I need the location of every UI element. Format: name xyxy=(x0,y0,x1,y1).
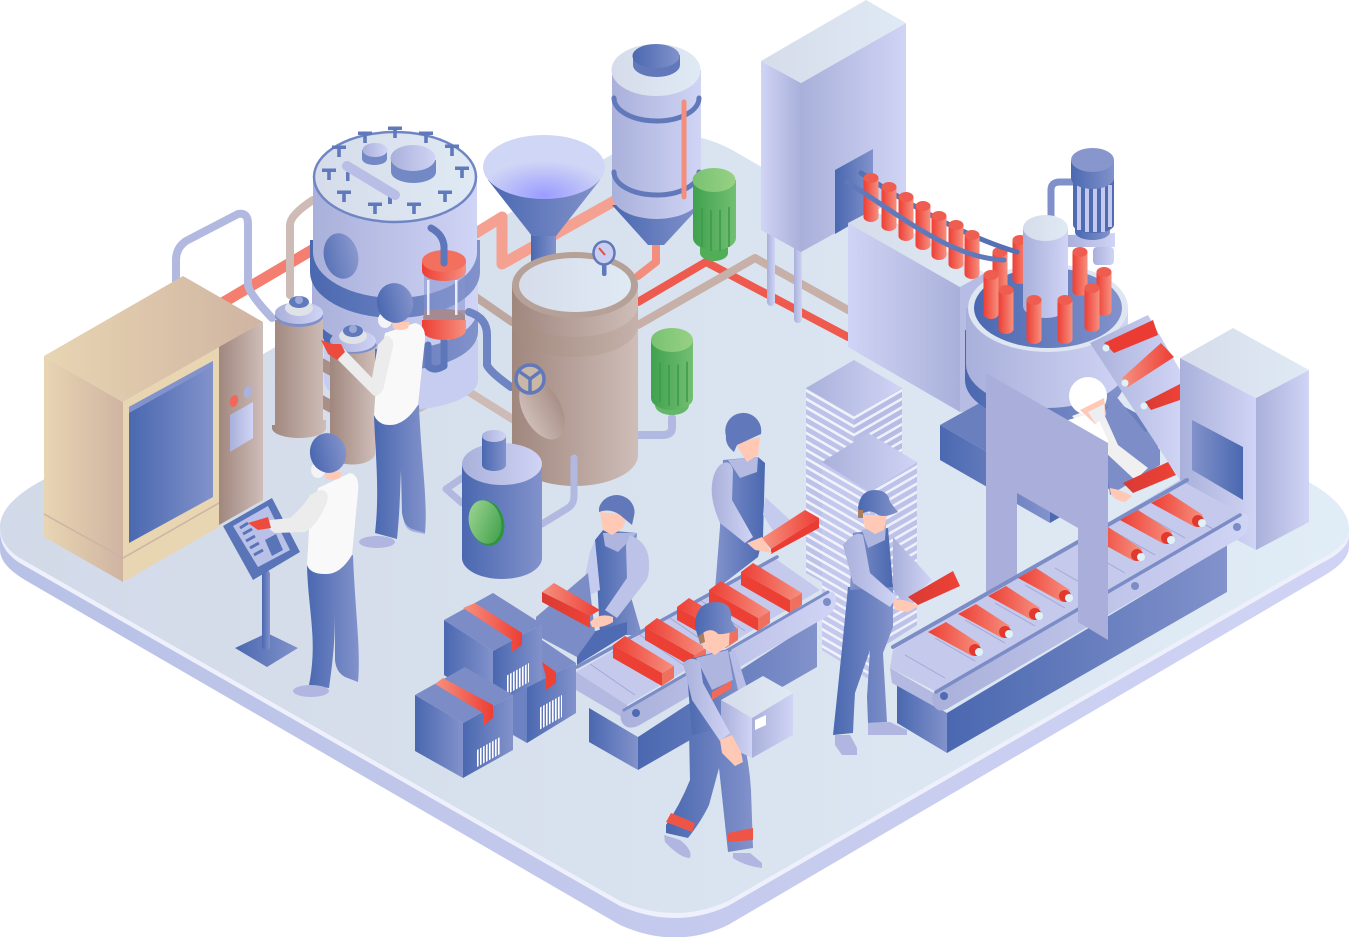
right machine cabinet xyxy=(1180,328,1309,550)
held red tube and hand of white worker xyxy=(1110,462,1176,502)
arch gantry xyxy=(986,373,1108,640)
open cardboard box at station xyxy=(536,573,627,665)
conveyor base xyxy=(589,708,638,770)
lid flange bolts xyxy=(322,126,469,214)
left conveyor xyxy=(576,557,836,770)
worker holding red tube xyxy=(833,490,960,755)
control panel on stand xyxy=(223,498,300,667)
drive motor and bracket xyxy=(1068,148,1115,265)
red bar held at station xyxy=(542,583,613,628)
stacked cartons xyxy=(415,593,576,778)
worker behind left conveyor with red bar xyxy=(712,413,819,590)
brown columns xyxy=(272,296,377,465)
brown mixing tank xyxy=(510,242,638,486)
small blue tank with green indicator xyxy=(446,430,574,579)
carton bottom xyxy=(415,667,513,778)
centre column xyxy=(1023,228,1068,318)
torso xyxy=(686,648,740,735)
funnel hopper xyxy=(483,135,605,270)
motor pipe xyxy=(1051,182,1073,216)
trousers xyxy=(666,722,753,852)
worker at packing station xyxy=(580,495,649,635)
tall electrical cabinet on legs xyxy=(761,0,906,323)
row of red tubes xyxy=(847,173,1017,279)
packing worker in white behind arch xyxy=(1068,377,1160,495)
product tubes on belt xyxy=(928,493,1206,656)
worker carrying box xyxy=(664,602,793,868)
pipes behind the machines xyxy=(176,200,848,435)
carton middle xyxy=(513,640,576,743)
valve spout and wheel xyxy=(510,371,574,447)
conveyor base xyxy=(897,683,947,753)
green motor front xyxy=(651,328,693,415)
front rail xyxy=(620,591,836,728)
silo with conical bottom xyxy=(612,44,701,245)
belt xyxy=(576,557,820,705)
green motor rear xyxy=(692,168,736,261)
front red tubes xyxy=(984,270,1100,344)
base block under mixer xyxy=(940,365,1158,523)
reactor tower with bolted lid xyxy=(310,126,480,410)
filling machine block xyxy=(848,210,985,412)
right conveyor xyxy=(890,480,1249,753)
mixer vessel xyxy=(965,182,1128,422)
worker in white at panel xyxy=(248,429,359,697)
back red tubes xyxy=(992,235,1112,316)
worker in white at tower xyxy=(321,279,426,548)
carton top xyxy=(444,593,542,705)
pressure gauge xyxy=(602,260,606,276)
arch right leg in front of conveyor xyxy=(1078,432,1108,640)
paper stacks xyxy=(806,360,917,680)
sight glass with red caps xyxy=(422,228,511,387)
front rail xyxy=(932,513,1249,711)
box in hands xyxy=(721,676,793,758)
head xyxy=(702,625,730,655)
belt xyxy=(890,480,1240,692)
chute with red tubes xyxy=(1090,315,1180,480)
red product blocks xyxy=(613,563,802,686)
beige control cabinet xyxy=(44,276,263,582)
near arm xyxy=(683,659,730,741)
